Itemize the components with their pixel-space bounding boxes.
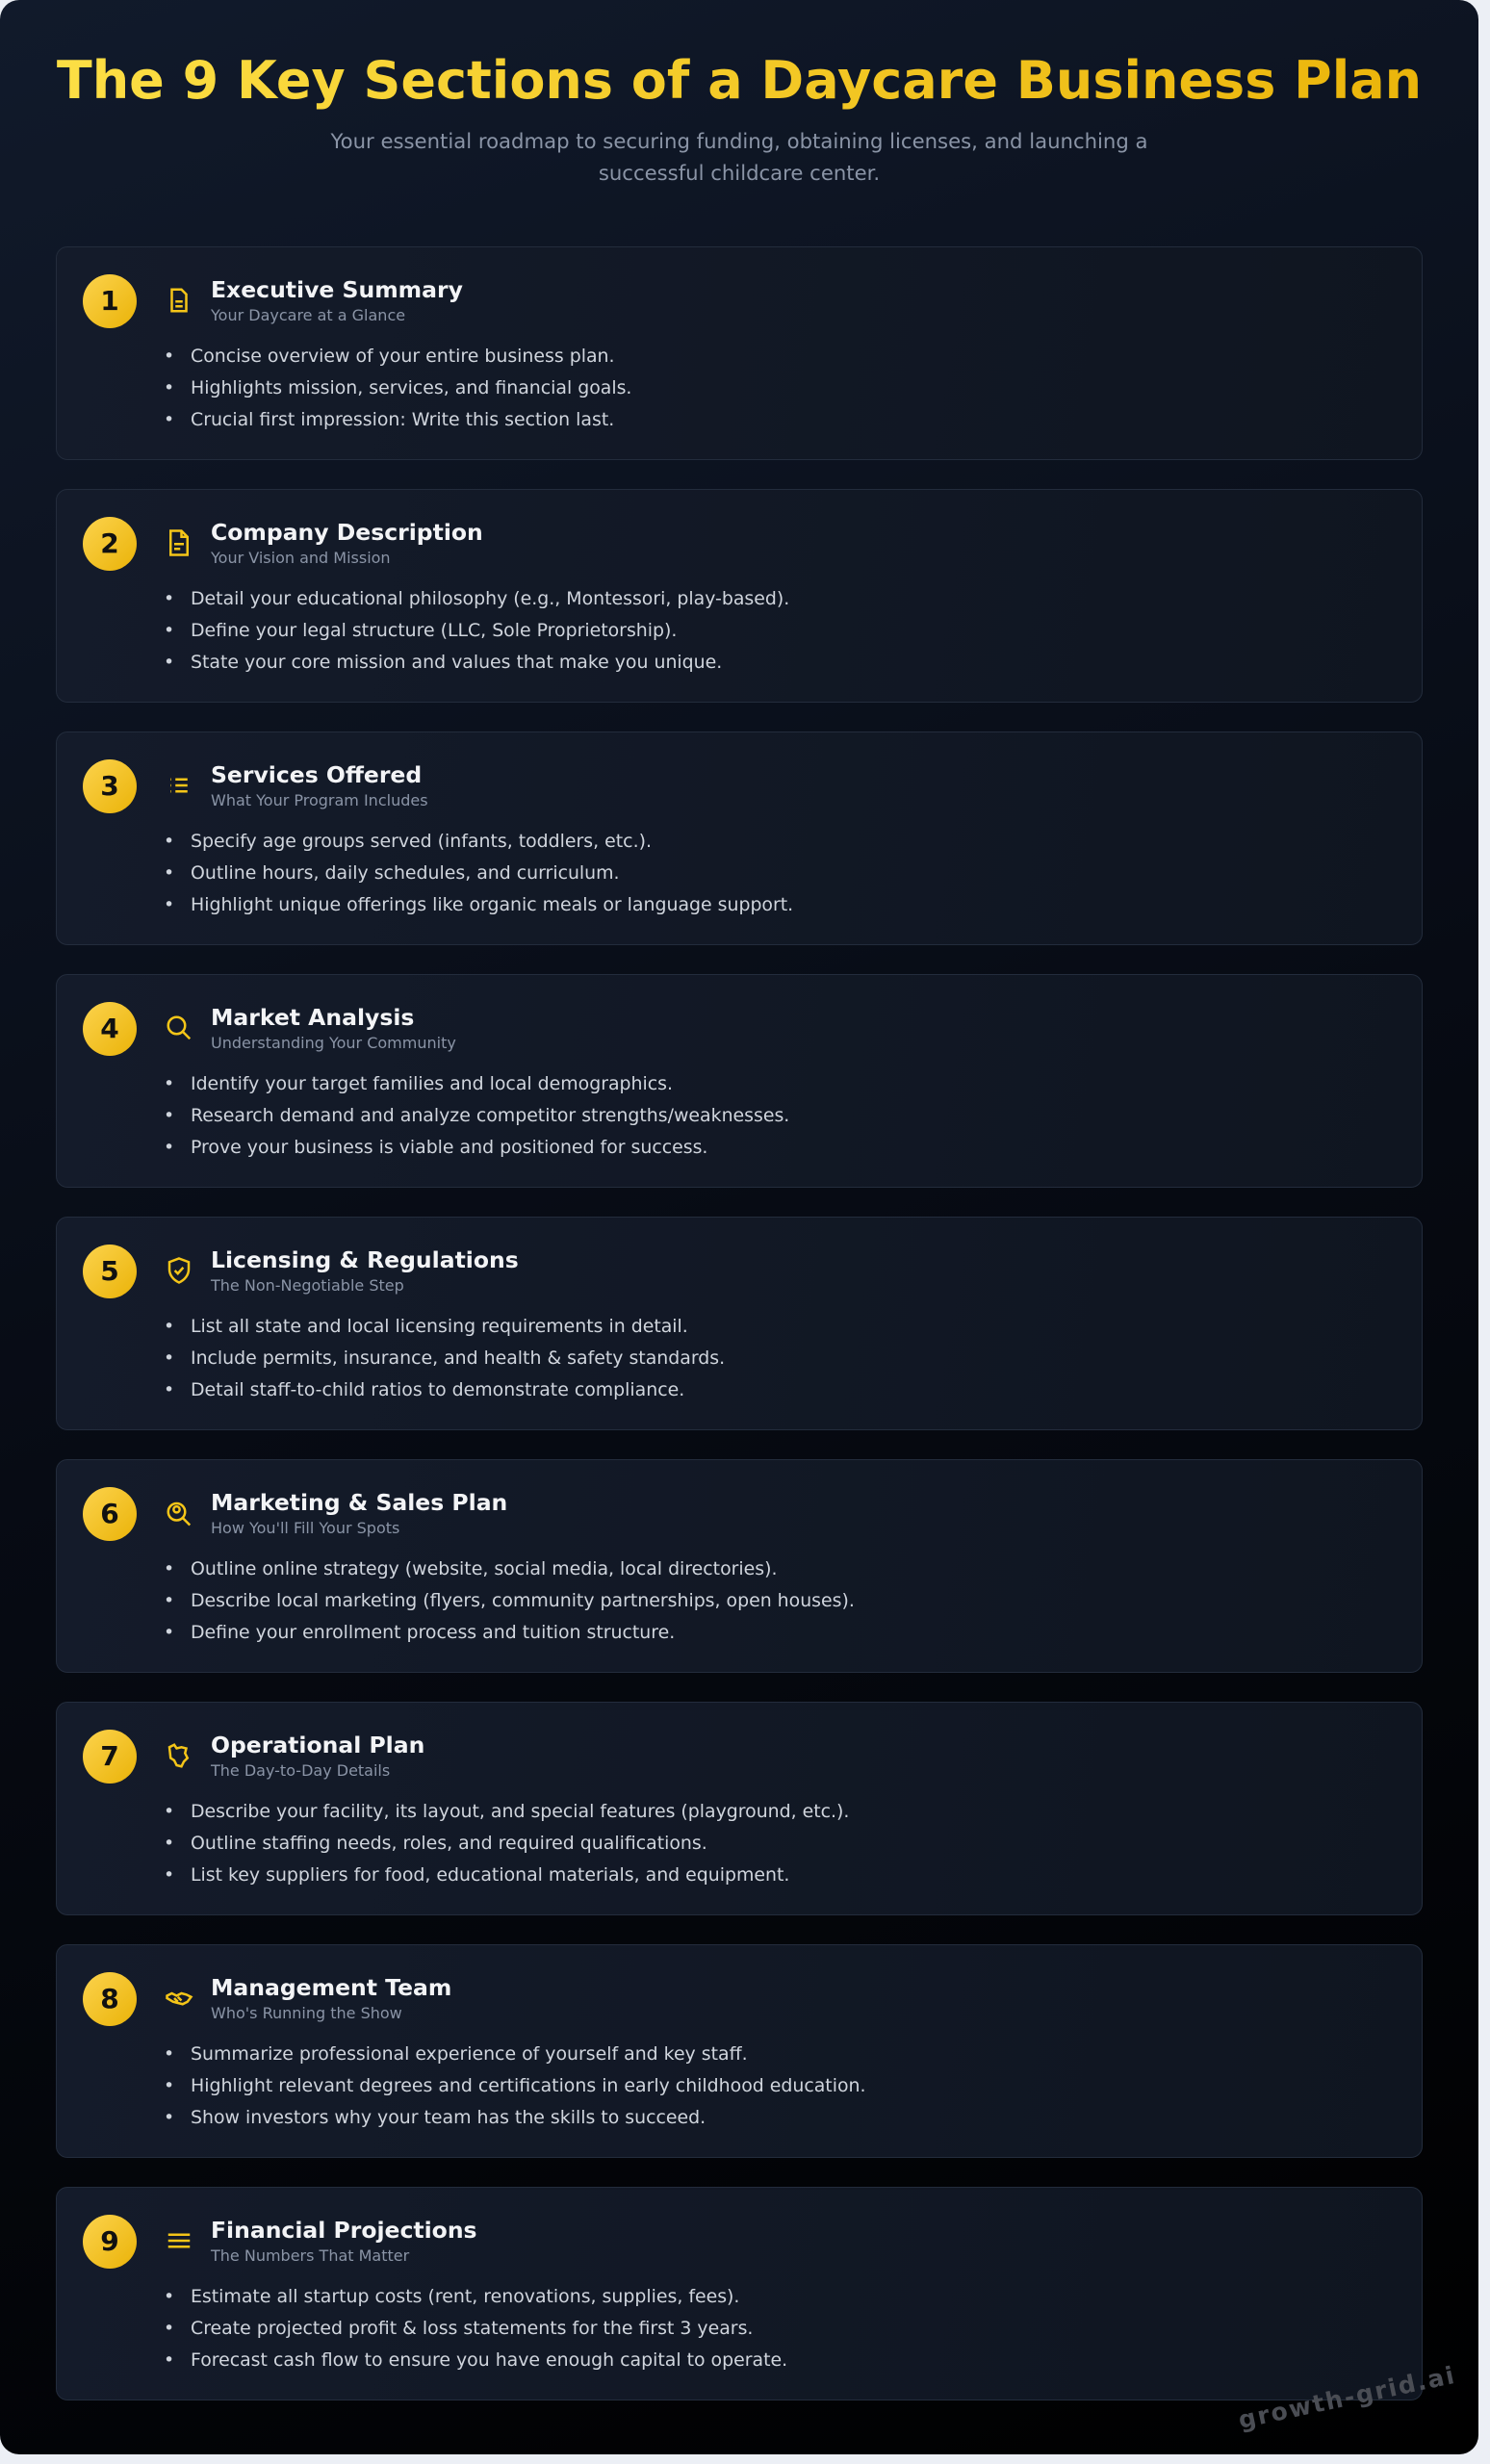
heading: Operational Plan xyxy=(211,1732,424,1758)
number badge 9: 9 xyxy=(100,2225,119,2257)
number badge 7 xyxy=(83,1730,137,1784)
number badge 2: 2 xyxy=(100,527,119,559)
heading: Financial Projections xyxy=(211,2217,477,2244)
bullets: Define your enrollment process and tuition structure. xyxy=(191,1622,675,1643)
watermark: growth-grid.ai xyxy=(1236,2361,1458,2434)
bullets: Include permits, insurance, and health & safety standards. xyxy=(191,1348,725,1369)
number badge 3: 3 xyxy=(100,770,119,802)
bullets: Highlights mission, services, and financial goals. xyxy=(191,377,631,398)
number badge 4 xyxy=(83,1002,137,1056)
bullets xyxy=(166,346,631,430)
bullets: List all state and local licensing requirements in detail. xyxy=(191,1316,688,1337)
number badge 5 xyxy=(83,1245,137,1298)
bullets xyxy=(166,2286,787,2371)
subheading: Your Vision and Mission xyxy=(211,549,391,567)
heading: Services Offered xyxy=(211,761,422,788)
subheading: Understanding Your Community xyxy=(211,1034,456,1052)
icon: search person xyxy=(167,1502,191,1527)
bullets: Define your legal structure (LLC, Sole Proprietorship). xyxy=(191,620,677,641)
number badge 4: 4 xyxy=(100,1013,119,1044)
icon: shield xyxy=(167,1257,191,1284)
icon: lines xyxy=(167,2233,191,2248)
number badge 3 xyxy=(83,759,137,813)
bullets xyxy=(166,588,789,673)
heading: Company Description xyxy=(211,519,483,546)
bullets: Detail staff-to-child ratios to demonstrate compliance. xyxy=(191,1379,684,1400)
bullets: Detail your educational philosophy (e.g., Montessori, play-based). xyxy=(191,588,789,609)
subheading: What Your Program Includes xyxy=(211,791,428,809)
bullets: Describe local marketing (flyers, community partnerships, open houses). xyxy=(191,1590,855,1611)
icon: handshake xyxy=(166,1992,193,2006)
bullets: Concise overview of your entire business plan. xyxy=(191,346,615,367)
number badge 1 xyxy=(83,274,137,328)
bullets: Estimate all startup costs (rent, renovations, supplies, fees). xyxy=(191,2286,739,2307)
bullets: Highlight relevant degrees and certifications in early childhood education. xyxy=(191,2075,865,2096)
bullets: Identify your target families and local demographics. xyxy=(191,1073,673,1094)
subheading: The Numbers That Matter xyxy=(211,2246,409,2265)
heading: Licensing & Regulations xyxy=(211,1246,519,1273)
heading: Marketing & Sales Plan xyxy=(211,1489,507,1516)
bullets: List key suppliers for food, educational materials, and equipment. xyxy=(191,1864,789,1886)
number badge 6: 6 xyxy=(100,1498,119,1529)
bullets: Describe your facility, its layout, and special features (playground, etc.). xyxy=(191,1801,849,1822)
bullets: Summarize professional experience of yourself and key staff. xyxy=(191,2043,748,2065)
heading: Management Team xyxy=(211,1974,451,2001)
subheading: How You'll Fill Your Spots xyxy=(211,1519,399,1537)
bullets xyxy=(166,2043,865,2128)
icon: file xyxy=(169,529,189,556)
bullets: Research demand and analyze competitor strengths/weaknesses. xyxy=(191,1105,789,1126)
bullets: Highlight unique offerings like organic meals or language support. xyxy=(191,894,793,915)
subtitle: Your essential roadmap to securing funding, obtaining licenses, and launching a successful childcare center. xyxy=(330,129,1148,185)
number badge 6 xyxy=(83,1487,137,1541)
icon: search xyxy=(167,1016,191,1040)
panel: licensing xyxy=(56,1217,1423,1430)
number badge 9 xyxy=(83,2215,137,2269)
number badge 2 xyxy=(83,517,137,571)
icon: document xyxy=(170,289,188,312)
bullets xyxy=(166,1073,789,1158)
number badge 1: 1 xyxy=(100,285,119,317)
number badge 7: 7 xyxy=(100,1740,119,1772)
bullets: Outline online strategy (website, social media, local directories). xyxy=(191,1558,777,1579)
panel: management team xyxy=(56,1944,1423,2158)
subheading: Who's Running the Show xyxy=(211,2004,402,2022)
panel: marketing xyxy=(56,1459,1423,1673)
bullets xyxy=(166,1801,849,1886)
bullets: Outline hours, daily schedules, and curriculum. xyxy=(191,862,620,884)
panel: services offered xyxy=(56,732,1423,945)
subheading: Your Daycare at a Glance xyxy=(211,306,405,324)
bullets: State your core mission and values that make you unique. xyxy=(191,652,722,673)
subheading: The Day-to-Day Details xyxy=(211,1761,390,1780)
number badge 5: 5 xyxy=(100,1255,119,1287)
panel: financial projections xyxy=(56,2187,1423,2400)
title: The 9 Key Sections of a Daycare Business Plan xyxy=(57,50,1422,111)
bullets: Create projected profit & loss statements for the first 3 years. xyxy=(191,2318,753,2339)
panel: executive summary xyxy=(56,246,1423,460)
bullets xyxy=(166,831,793,915)
panel: company description xyxy=(56,489,1423,703)
bullets: Show investors why your team has the skills to succeed. xyxy=(191,2107,706,2128)
bullets: Outline staffing needs, roles, and required qualifications. xyxy=(191,1833,707,1854)
bullets: Specify age groups served (infants, toddlers, etc.). xyxy=(191,831,652,852)
heading: Executive Summary xyxy=(211,276,463,303)
icon: map xyxy=(167,1743,189,1768)
bullets xyxy=(166,1316,725,1400)
heading: Market Analysis xyxy=(211,1004,414,1031)
bullets: Crucial first impression: Write this section last. xyxy=(191,409,614,430)
subheading: The Non-Negotiable Step xyxy=(211,1276,404,1295)
bullets: Forecast cash flow to ensure you have enough capital to operate. xyxy=(191,2349,787,2371)
bullets xyxy=(166,1558,855,1643)
number badge 8: 8 xyxy=(100,1983,119,2015)
bullets: Prove your business is viable and positioned for success. xyxy=(191,1137,707,1158)
icon: list xyxy=(170,778,188,793)
number badge 8 xyxy=(83,1972,137,2026)
panel: market analysis xyxy=(56,974,1423,1188)
panel: operational plan xyxy=(56,1702,1423,1915)
